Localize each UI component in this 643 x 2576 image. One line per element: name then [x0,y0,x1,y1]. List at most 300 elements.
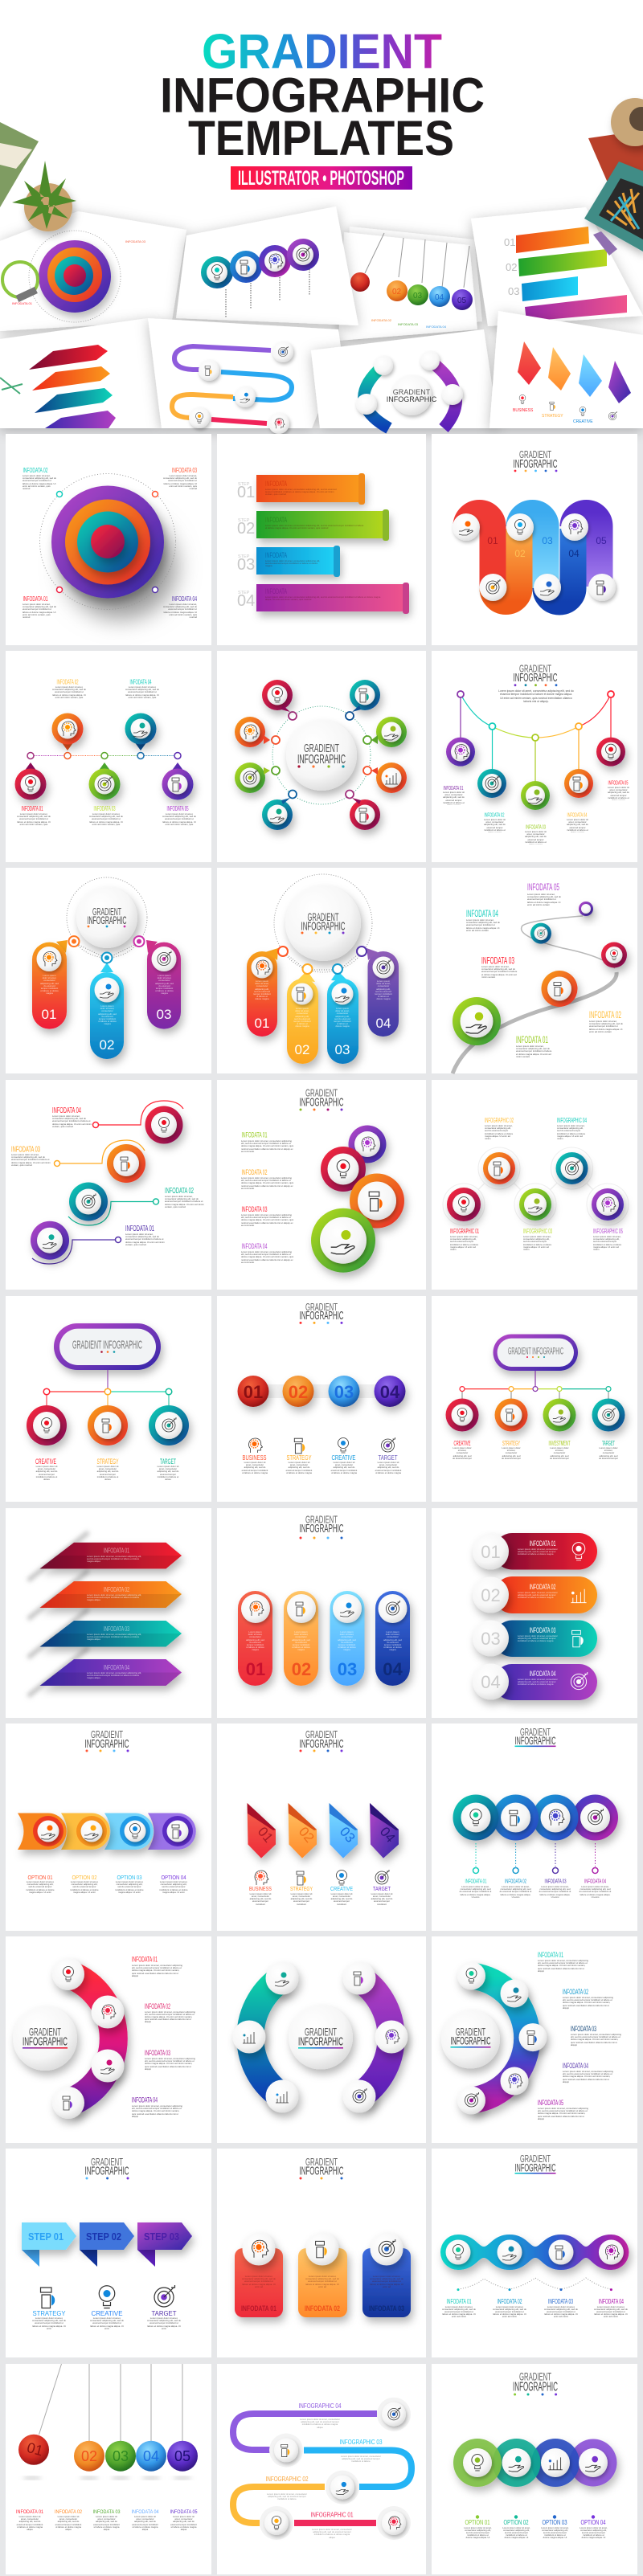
collage sheet: ribbons [471,207,643,326]
desk: green book [0,122,39,207]
chart: three pills with icons and numbers: 01 [42,1007,56,1022]
heading [299,1088,344,1110]
chart: hub ball and dotted ring [274,874,372,972]
text and icons: pill contents: INFODATA 04 [529,1670,556,1678]
heading in hub: INFOGRAPHIC [297,753,346,767]
text: ball labels: INFODATA 01 [16,2509,43,2515]
chart: leader lines and arcs [32,1101,183,1264]
text: arc notes: INFODATA 03 [571,2025,596,2033]
text: branch labels: INVESTMENT [548,1440,571,1447]
panel: bead chain [432,2149,637,2357]
text: four notes: INFODATA 02 [241,1168,267,1176]
icons and labels: TARGET [373,1887,391,1892]
chart: four spheres with numbers: 04 [380,1382,400,1402]
heading: GRADIENT [305,1302,338,1313]
text: option labels: OPTION 01 [27,1874,53,1881]
panel: concentric circles [6,434,211,645]
heading: GRADIENT [91,2157,123,2168]
heading [513,2371,558,2396]
heading: INFOGRAPHIC [299,1523,344,1535]
heading: GRADIENT [519,2371,551,2383]
panel: hierarchy with three branches [6,1296,211,1502]
text: banner labels: INFODATA 04 [104,1664,129,1671]
icons and labels [248,1870,394,1908]
panel: Newton's cradle [6,2364,211,2574]
collage sheet: pendulum template: INFODATA 03 [398,322,419,326]
heading: GRADIENT [520,1727,551,1738]
text: path labels: INFOGRAPHIC 01 [310,2510,354,2518]
chart: diagonal shadows [28,1532,88,1696]
chart: four stacked discs [311,1125,404,1273]
collage sheet: pendulum template: 03 [413,292,423,301]
text: option labels: OPTION 04 [580,2519,606,2526]
chart: numbered white balls: 03 [481,1629,501,1649]
heading: INFOGRAPHIC [299,2165,344,2178]
chart: four arrow banners [40,1543,182,1686]
collage sheet: flags: BUSINESS [513,408,534,413]
panel: zigzag rings [432,1080,637,1290]
icons and labels [32,2285,181,2339]
heading [514,2153,556,2174]
heading: INFOGRAPHIC [299,1097,344,1110]
heading: GRADIENT [305,1729,338,1740]
panel: three cards [217,2149,426,2357]
chart: numbered white balls: 02 [481,1585,501,1605]
heading [85,2157,129,2179]
heading in hub: INFOGRAPHIC [298,2035,343,2049]
collage sheet: pendulum template [338,232,477,341]
text: arc notes: INFODATA 04 [132,2096,158,2104]
panel: S-wave infographic [432,434,637,645]
chart: gradient arc and balls [13,1958,124,2119]
heading [514,1727,556,1747]
text: branch labels: TARGET [602,1440,615,1447]
heading in hub: GRADIENT [92,906,121,918]
collage sheet: pendulum template: 05 [457,296,467,305]
collage sheet: ribbons: 02 [506,261,517,273]
chart: nested circles with dotted ring [40,474,177,619]
text: pin labels: INFODATA 01 [21,805,43,812]
collage sheet: circular arcs [311,329,498,428]
chart: four spheres with numbers: 01 [244,1382,263,1402]
chart: four spheres with numbers [238,1376,405,1407]
text: step numbers and ribbon labels: STEP [238,591,250,595]
chart: curve with hanging rings [446,691,625,810]
text and icons: pill contents: INFODATA 02 [529,1583,556,1591]
text: ring labels: INFOGRAPHIC 03 [523,1228,552,1235]
text: arc notes: INFODATA 04 [563,2062,588,2070]
chart: three rounded cards [235,2232,411,2317]
heading [299,2157,344,2179]
panel: paper ribbons [217,434,426,645]
text: ring labels: INFOGRAPHIC 02 [485,1117,514,1124]
heading [299,1515,344,1539]
panel: hierarchy with four branches [432,1296,637,1502]
panel: angled flags [217,1723,426,1931]
chart: four pills with icons and numbers [247,947,399,1064]
chart: branching lines [460,1371,611,1400]
text: arc notes: INFODATA 02 [563,1988,588,1996]
collage sheet: snake timeline [148,318,342,434]
chart: numbered white balls [473,1533,509,1700]
panel: four pills under hub [217,868,426,1073]
text: step numbers and ribbon labels: 01 [237,484,255,501]
chart: four rings [445,1398,625,1432]
text: option labels [26,1874,188,1902]
collage sheet: concentric circles: INFODATA 01 [12,301,33,305]
text: intro: Lorem ipsum dolor sit amet, consectetur adipiscing elit, sed do eiusmod tempor incididunt ut labore et dolore magna aliqua. Ut enim ad minim veniam, quis nostrud exercitation ullamco laboris nisi ut aliquip. [498,689,574,703]
icons and labels [241,1437,402,1478]
text: banner labels: INFODATA 02 [104,1586,129,1593]
chart: three step flags: STEP 01 [28,2230,63,2243]
text: milestone labels: INFODATA 05 [527,883,559,893]
text: ball labels: INFODATA 02 [55,2509,82,2515]
chart: five rings in zigzag [443,1147,629,1225]
text: curve labels: INFODATA 01 [444,784,463,791]
text: milestone labels: INFODATA 04 [466,910,498,919]
text: ring labels [11,1106,204,1253]
icons and labels: TARGET [151,2309,177,2317]
chart: nodes with icons [260,2398,411,2540]
text: four notes [241,1131,294,1267]
heading: GRADIENT [519,449,551,460]
chart: pills, icons and numbers: 03 [338,1659,357,1679]
text: arc notes [132,1956,196,2122]
text: four notes: INFODATA 03 [241,1205,267,1213]
chart: hub ball and dotted ring [67,877,147,958]
chart: four overlapping circles [453,2439,617,2487]
icons and labels: CREATIVE [92,2309,123,2317]
text: arc notes: INFODATA 01 [538,1951,563,1959]
chart: three rounded cards: INFODATA 03 [369,2304,404,2312]
text and icons: pill contents: INFODATA 03 [529,1626,556,1634]
chart: four spheres with numbers: 03 [334,1382,354,1402]
heading: GRADIENT [305,1088,338,1099]
text: bead labels: INFODATA 01 [447,2298,472,2305]
heading in hub: GRADIENT [307,910,339,923]
text: ring labels: INFODATA 04 [52,1106,81,1115]
chart: branching lines [43,1370,172,1409]
icons and labels: STRATEGY [286,1454,312,1462]
heading in hub [297,742,346,768]
chart: dotted line with nodes [27,752,181,758]
chart: numbered white balls: 01 [481,1542,501,1562]
chart: three step flags [22,2222,192,2267]
chart: four ribbon bars [256,473,409,614]
text: pin labels: INFODATA 05 [167,805,189,812]
chart: three rings [27,1405,189,1445]
chart: three pills with icons and numbers: 03 [157,1007,171,1022]
collage sheet: pendulum template: 02 [392,288,402,296]
heading [85,1729,129,1752]
text: curve labels [441,779,631,844]
chart: left and right arcs with balls [233,1962,408,2113]
text: band numbers: 03 [542,535,553,546]
panel: three pills under hub [6,868,211,1073]
text: banner labels: INFODATA 01 [104,1548,129,1555]
chart: four pills with icons and numbers: 04 [376,1016,391,1031]
text: step numbers and ribbon labels: STEP [238,518,250,523]
icons and labels: CREATIVE [330,1887,353,1892]
collage sheet: pendulum template: 04 [435,293,444,302]
chart: five balls with shadows: 04 [143,2448,159,2464]
banner: Illustrator and Photoshop [231,166,412,190]
text: four labelled notes: INFODATA 01 [23,595,48,603]
text: arc notes: INFODATA 05 [538,2099,563,2107]
heading: GRADIENT [520,2153,551,2165]
chart: four flags with numbers: 01 [255,1824,276,1846]
text: arc notes [538,1951,622,2124]
chart: pills, icons and numbers [238,1591,410,1686]
text: step numbers and ribbon labels: STEP [238,554,250,559]
text: bead labels: INFODATA 02 [497,2298,522,2305]
text: ring labels: INFODATA 01 [465,1878,487,1885]
icons and labels: STRATEGY [290,1887,313,1892]
text: step numbers and ribbon labels: 04 [237,592,255,610]
text: branch labels [453,1440,618,1462]
text: ring labels: INFODATA 02 [165,1187,194,1196]
heading [513,449,558,472]
text: pin labels [16,679,197,829]
text: bead labels [442,2298,628,2325]
desk: teal box of pens [584,162,643,256]
heading [299,1729,344,1752]
text: option labels: OPTION 01 [465,2519,490,2526]
heading in hub: GRADIENT [304,742,339,755]
collage sheet: ring chain [176,206,358,325]
text: band numbers: 04 [568,548,580,559]
panel: four vertical pills [217,1508,426,1718]
collage sheet: pendulum template: INFODATA 02 [371,318,392,322]
chart: four pills with icons and numbers: 02 [295,1042,309,1057]
chart: eight icon rings [235,680,407,830]
text: four notes: INFODATA 01 [241,1131,267,1139]
heading in hub: INFOGRAPHIC [87,914,127,926]
chart: four spheres with numbers: 02 [289,1382,308,1402]
heading in hub: INFOGRAPHIC [301,919,346,934]
heading: INFOGRAPHIC [299,1310,344,1323]
text: four labelled notes: INFODATA 04 [172,595,197,603]
desk: wooden bowl and red paper [588,98,643,181]
text: bead labels: INFODATA 03 [548,2298,573,2305]
chart: winding path [233,2414,412,2523]
collage sheet: pendulum template: INFODATA 04 [426,325,447,329]
chart: dotted wave [457,2278,612,2291]
chart: four pills with icons and numbers: 03 [335,1042,350,1057]
heading [513,664,558,686]
panel: road with milestones [432,868,637,1073]
text: branch labels [35,1458,180,1481]
icons: white discs [453,513,616,601]
text: step numbers and ribbon labels: INFODATA [265,480,287,488]
collage sheet: concentric circles: INFODATA 03 [125,239,146,243]
text: curve labels: INFODATA 04 [567,812,587,819]
text: branch labels: CREATIVE [35,1458,56,1466]
collage sheet: flags [489,311,643,428]
chart: stadium header [494,1334,578,1371]
banner: Illustrator and Photoshop: ILLUSTRATOR • PHOTOSHOP [238,167,404,190]
heading in ball [23,2026,68,2049]
collage sheet: circular arcs: INFOGRAPHIC [387,395,437,403]
chart: stadium header: GRADIENT INFOGRAPHIC [72,1339,142,1351]
panel: half ring with four balls [6,1936,211,2143]
panel: horizontal pills with numbered balls [432,1508,637,1718]
text: branch labels: STRATEGY [96,1458,119,1466]
heading: INFOGRAPHIC [514,1735,556,1747]
text: step numbers and ribbon labels: STEP [238,482,250,487]
heading: GRADIENT [305,2157,338,2168]
panel: overlapping discs [217,1080,426,1290]
text: milestone labels: INFODATA 01 [516,1036,548,1045]
text: arc notes: INFODATA 02 [145,2002,170,2010]
chart: winding band [466,513,600,602]
chart: dotted drops with nodes [473,1843,598,1874]
chart: three pills with icons and numbers: 02 [100,1037,114,1053]
text: option labels: OPTION 04 [161,1874,186,1881]
text: pin labels: INFODATA 03 [93,805,116,812]
chart: dotted ring, hub and nodes [272,706,371,804]
chart: milestone rings [453,902,627,1045]
panel: staircase rings with leader lines [6,1080,211,1290]
heading in ball: INFOGRAPHIC [450,2034,490,2047]
text: milestone labels: INFODATA 03 [481,956,514,966]
chart: numbered white balls: 04 [481,1672,501,1692]
chart: four flags with numbers: 04 [377,1824,399,1846]
chart: gradient arc and balls [441,1962,547,2115]
collage sheet: flags: CREATIVE [573,419,593,424]
panel: option arrows [6,1723,211,1931]
panel: snake timeline [217,2364,426,2574]
heading [299,1302,344,1324]
text: pin labels: INFODATA 02 [56,679,79,686]
panel: radial hub with eight nodes [217,651,426,862]
heading: INFOGRAPHIC [513,2381,558,2394]
heading in hub [87,906,127,927]
text: branch labels: TARGET [160,1458,176,1466]
heading: INFOGRAPHIC [514,2162,556,2174]
title: GRADIENT: GRADIENT [202,24,442,79]
panel: half ring with five balls [432,1936,637,2143]
text: band numbers: 02 [514,548,526,559]
chart: pills, icons and numbers: 04 [383,1659,403,1679]
text: pin labels: INFODATA 04 [130,679,152,686]
text: ring labels: INFOGRAPHIC 01 [450,1228,479,1235]
heading: GRADIENT [519,664,551,675]
text: branch labels: STRATEGY [502,1440,520,1447]
heading: INFOGRAPHIC [299,1738,344,1751]
text: option labels: OPTION 03 [542,2519,567,2526]
heading: INFOGRAPHIC [85,2165,129,2178]
text: branch labels: CREATIVE [453,1440,471,1447]
text: step numbers and ribbon labels: 03 [237,556,255,574]
collage sheet: ribbons: 03 [508,285,519,297]
icons and labels: CREATIVE [331,1454,355,1462]
header area: title and template collage [0,0,643,434]
chart: four curved segments with rings [18,1813,196,1850]
collage sheet: flags: STRATEGY [542,414,563,419]
text: ball labels: INFODATA 03 [93,2509,121,2515]
heading: INFOGRAPHIC [513,458,558,471]
text: four labelled notes: INFODATA 02 [23,467,48,474]
text: four labelled notes [23,467,197,619]
chart: five balls with shadows: 02 [81,2448,97,2464]
text: arc notes: INFODATA 03 [145,2049,170,2057]
text: banner labels: INFODATA 03 [104,1625,129,1633]
chart: five teardrop pins [14,714,193,800]
text: curve labels: INFODATA 02 [484,812,505,819]
text and icons: pill contents [518,1539,588,1690]
icons and labels: BUSINESS [243,1454,267,1462]
text: ring labels [450,1117,623,1254]
text: step numbers and ribbon labels: 02 [237,520,255,538]
text: band numbers: 01 [487,535,498,546]
chart: four rings [31,1106,183,1260]
panel: linked rings with dotted drops [432,1723,637,1931]
text: path labels: INFOGRAPHIC 03 [339,2438,383,2446]
chart: five balls with shadows [18,2435,198,2480]
text: path labels: INFOGRAPHIC 02 [265,2475,309,2483]
text: step numbers and ribbon labels: INFODATA [265,516,287,524]
chart: three rounded cards: INFODATA 01 [241,2304,276,2312]
collage sheet: stacked page behind pendulum [346,227,482,334]
heading in hub [301,910,346,934]
text: four notes: INFODATA 04 [241,1242,267,1250]
collage sheet: ribbons: 01 [504,236,515,248]
chart: three step flags: STEP 02 [86,2230,121,2243]
text: ring labels: INFODATA 03 [545,1878,566,1885]
chart: three pills with icons and numbers [32,936,181,1059]
icons and labels: STRATEGY [32,2309,66,2317]
chart: four pills with icons and numbers: 01 [255,1016,269,1031]
heading in ball: INFOGRAPHIC [23,2035,68,2049]
chart: five balls with shadows: 03 [113,2448,129,2464]
text: ring labels: INFODATA 03 [11,1146,40,1154]
panel: hanging curve [432,651,637,862]
text: band numbers [487,535,607,559]
chart: stadium header: GRADIENT INFOGRAPHIC [508,1346,563,1357]
text: ring labels: INFOGRAPHIC 04 [557,1117,587,1124]
chart: five balls with shadows: 05 [174,2448,190,2464]
text: path labels [265,2402,383,2540]
collage sheet: concentric circles [0,211,186,331]
heading in ball [450,2026,490,2048]
chart: stadium header [54,1323,161,1370]
text: step numbers and ribbon labels: INFODATA [265,587,287,595]
collage sheet: circular arcs: GRADIENT [393,388,431,396]
chart: pills, icons and numbers: 02 [292,1659,311,1679]
chart: strings [39,2364,182,2441]
heading: GRADIENT [91,1729,123,1740]
heading in ball: GRADIENT [29,2026,61,2038]
text: step numbers and ribbon labels [237,480,386,610]
icons and labels: BUSINESS [249,1887,272,1892]
heading: INFOGRAPHIC [85,1738,129,1751]
text: curve labels: INFODATA 03 [526,823,546,831]
text: option labels: OPTION 03 [117,1874,141,1881]
text: four labelled notes: INFODATA 03 [172,467,197,474]
chart: five balls with shadows: 01 [25,2439,45,2459]
heading in hub: GRADIENT [305,2026,337,2038]
panel: angled arrow banners [6,1508,211,1718]
text: option labels: OPTION 02 [72,1874,96,1881]
chart: grey road [453,916,616,1073]
chart: four flags with numbers [248,1803,399,1858]
chart: four linked rings [453,1795,618,1840]
text: arc notes: INFODATA 01 [132,1956,158,1964]
chart: four horizontal pills [494,1533,597,1700]
text: step numbers and ribbon labels: INFODATA [265,551,287,559]
heading in hub [298,2026,343,2049]
